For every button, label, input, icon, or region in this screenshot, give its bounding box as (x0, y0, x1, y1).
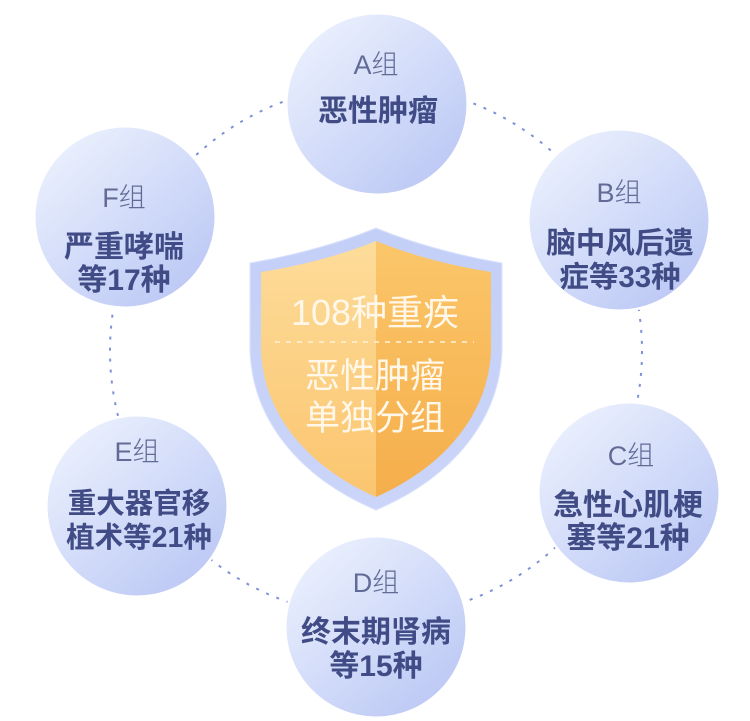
label: E group: E组 (114, 437, 160, 467)
label: F group: F组 (102, 183, 146, 213)
text: C diseases: 塞等21种 (566, 521, 690, 555)
circle: group A (285, 12, 469, 196)
text: A diseases: 恶性肿瘤 (318, 95, 438, 128)
shield: left face (261, 241, 376, 497)
text: E diseases: 重大器官移 (68, 488, 210, 520)
text: B diseases: 症等33种 (559, 261, 681, 294)
text: E diseases: 植术等21种 (66, 522, 212, 554)
text: D diseases: 终末期肾病 (301, 616, 451, 649)
circle: group C (537, 401, 721, 585)
shield: right face (376, 241, 491, 497)
circle: group E (45, 414, 229, 598)
text: F diseases: 等17种 (77, 264, 171, 297)
dotted connecting ring (110, 85, 642, 617)
text: C diseases: 急性心肌梗 (553, 489, 703, 522)
heading: 108 diseases: 108种重疾 (291, 292, 459, 333)
circle: group D (284, 535, 468, 719)
dashed divider (275, 341, 474, 343)
text: cancer grouped separately: 恶性肿瘤 (305, 357, 445, 396)
label: C group: C组 (608, 441, 654, 471)
shield (250, 228, 502, 510)
text: cancer grouped separately: 单独分组 (305, 399, 445, 438)
label: A group: A组 (353, 50, 399, 80)
circle: group F (33, 125, 217, 309)
text: B diseases: 脑中风后遗 (546, 227, 694, 260)
label: D group: D组 (353, 568, 399, 598)
label: B group: B组 (596, 178, 642, 208)
shield: outer rim (250, 228, 502, 510)
text: D diseases: 等15种 (329, 650, 423, 683)
circle: group B (527, 128, 711, 312)
text: F diseases: 严重哮喘 (64, 231, 184, 264)
